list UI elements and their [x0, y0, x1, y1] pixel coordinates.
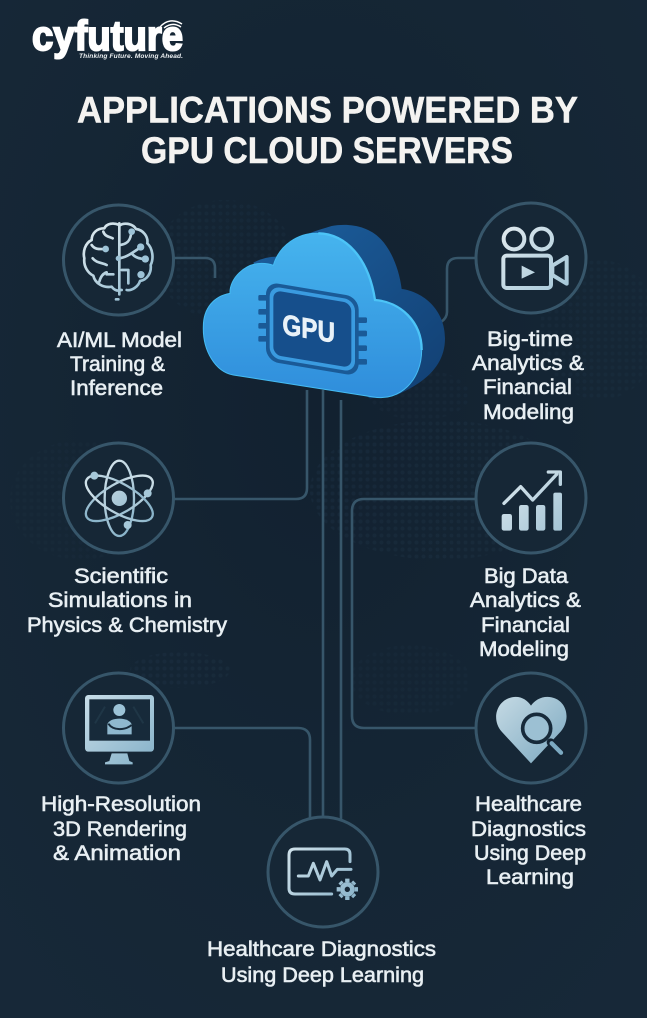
cloud with GPU chip	[203, 225, 445, 398]
label: Healthcare bottom: Using Deep Learning	[221, 964, 424, 987]
label: AI/ML: AI/ML Model	[57, 329, 182, 352]
label: Healthcare bottom: Healthcare Diagnostics	[207, 938, 436, 961]
connector lines	[174, 258, 475, 822]
label: Scientific: Physics & Chemistry	[27, 614, 228, 637]
icon circle: monitor	[64, 673, 174, 783]
label: Healthcare right: Diagnostics	[471, 818, 586, 841]
label: High-Resolution	[41, 793, 201, 865]
logo: cyfuture: cyfuture	[32, 12, 183, 59]
icon circle: monitor pulse and gear	[268, 817, 378, 927]
label: Scientific	[27, 565, 228, 637]
label: Healthcare right	[471, 793, 586, 889]
label: Big-time analytics: Financial	[483, 376, 572, 399]
label: Big-time analytics: Modeling	[483, 401, 574, 424]
label: Big-time analytics: Big-time	[487, 328, 573, 351]
title: GPU CLOUD SERVERS	[141, 130, 513, 171]
icon circle: heart with magnifier	[476, 673, 586, 783]
title: APPLICATIONS POWERED BY	[77, 90, 578, 130]
label: Scientific: Simulations in	[48, 589, 192, 612]
label: Healthcare right: Learning	[486, 866, 574, 889]
label: Healthcare right: Using Deep	[474, 842, 586, 865]
label: Big Data	[470, 565, 581, 661]
label: Big Data: Modeling	[479, 638, 569, 661]
icon circle: bar chart	[476, 443, 586, 553]
chip body: GPU	[282, 309, 335, 350]
label: Big Data: Big Data	[484, 565, 568, 588]
icon circle: atom	[64, 443, 174, 553]
title	[77, 90, 578, 171]
label: Healthcare bottom	[207, 938, 436, 987]
label: High-Resolution: High-Resolution	[41, 793, 201, 816]
chip pins	[258, 295, 367, 365]
label: Healthcare right: Healthcare	[475, 793, 582, 816]
icon circle: video camera	[476, 203, 586, 313]
logo: cyfuture: Thinking Future. Moving Ahead.	[79, 53, 183, 60]
label: High-Resolution: & Animation	[53, 842, 181, 865]
label: Big-time analytics	[472, 328, 584, 424]
label: Big Data: Analytics &	[470, 589, 581, 612]
label: AI/ML: Inference	[70, 377, 163, 400]
label: Big Data: Financial	[481, 614, 570, 637]
label: Scientific: Scientific	[74, 565, 168, 588]
label: High-Resolution: 3D Rendering	[53, 818, 187, 841]
label: AI/ML	[57, 329, 182, 400]
label: AI/ML: Training &	[70, 353, 165, 376]
icon circle: brain	[64, 205, 174, 315]
chip body	[266, 282, 359, 376]
label: Big-time analytics: Analytics &	[472, 352, 584, 375]
